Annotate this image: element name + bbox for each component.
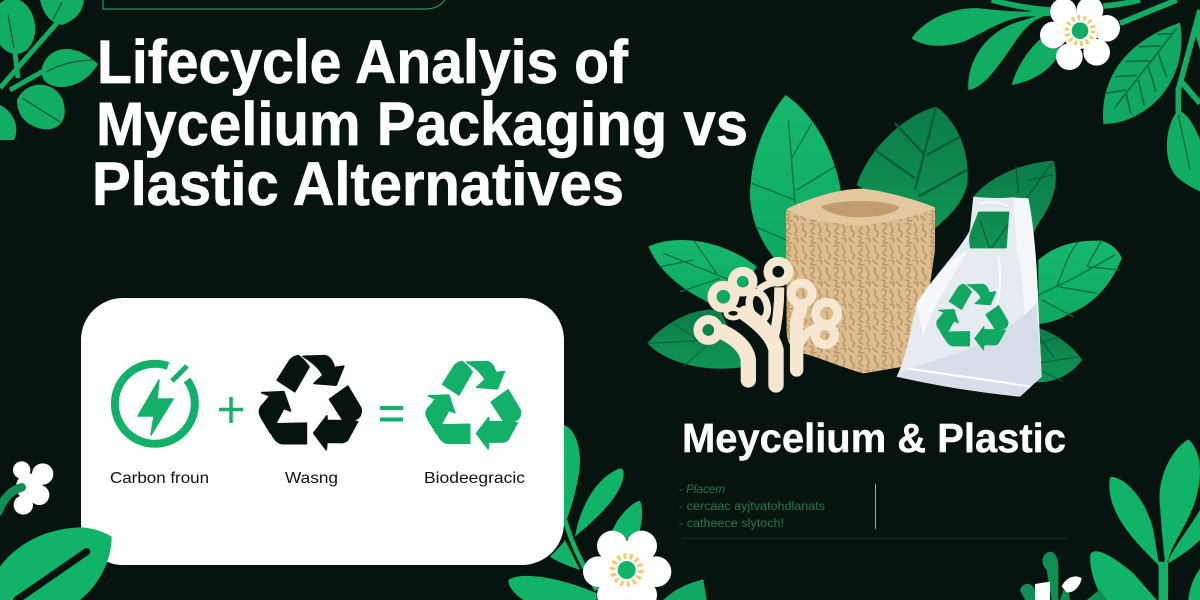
bullet list: - cercaac ayjtvatohdlanats: [679, 501, 825, 513]
icon: carbon energy: [115, 364, 195, 444]
bullet list: [679, 484, 825, 530]
divider: vertical rule: [875, 484, 876, 529]
foliage: bottom-right plants: [1020, 439, 1200, 600]
leaves behind products: [647, 95, 1122, 382]
title: [92, 28, 748, 218]
mycelium block: [786, 189, 935, 373]
icon: black recycle: [260, 356, 361, 450]
title: Mycelium Packaging vs: [96, 90, 748, 158]
top frame outline: [103, 0, 445, 9]
icon: recycle on bag: [937, 284, 1008, 350]
title: Lifecycle Analyis of: [97, 28, 629, 96]
foliage: top-left branch: [0, 0, 98, 140]
plastic bag: [897, 197, 1042, 397]
equation labels: [110, 470, 525, 487]
equation labels: Wasng: [285, 470, 338, 487]
bullet list: - catheece slytoch!: [679, 518, 784, 530]
foliage: bottom-centre branch: [508, 425, 707, 600]
panel: equation card: [81, 298, 564, 565]
foliage: bottom-left leaf and flower: [0, 461, 112, 600]
illustration: mycelium block and plastic bag: [647, 95, 1122, 397]
icon: white flower bottom centre: [583, 531, 671, 600]
equation labels: Carbon froun: [110, 470, 209, 487]
mycelium mushrooms: [698, 261, 838, 385]
divider: horizontal rule: [682, 538, 1067, 539]
equals sign: [380, 408, 403, 420]
title: Plastic Alternatives: [92, 150, 624, 218]
bullet list: - Placem: [679, 484, 725, 496]
foliage: top-right branch with flower: [912, 0, 1200, 192]
plus sign: [219, 397, 243, 423]
equation labels: Biodeegracic: [424, 470, 525, 487]
heading: Meycelium and Plastic: Meycelium & Plastic: [682, 415, 1066, 461]
icon: green recycle: [426, 361, 521, 449]
icon: white flower top right: [1040, 0, 1120, 70]
